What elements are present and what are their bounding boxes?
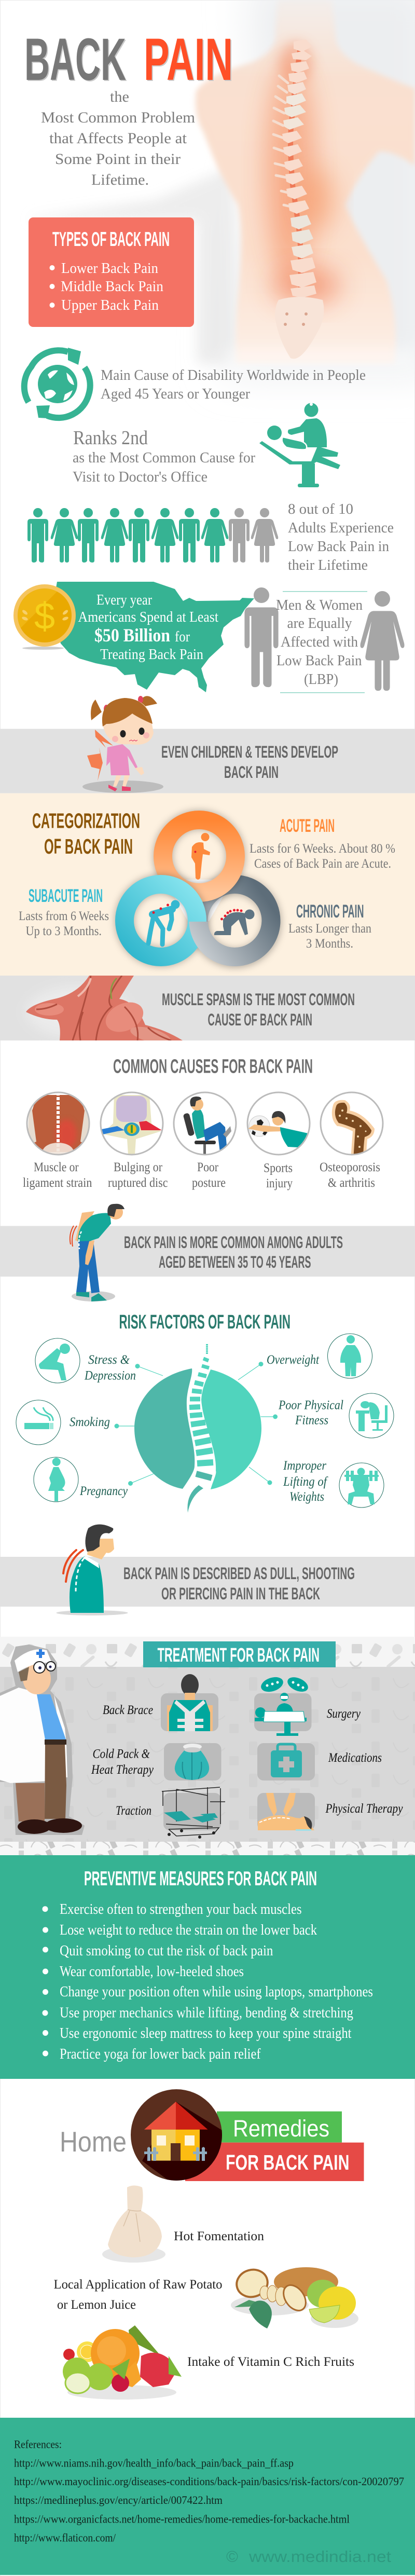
- label: Osteoporosis: [320, 1160, 380, 1174]
- remedy: vitamin C rich fruits: Intake of Vitamin C Rich Fruits: [187, 2355, 354, 2369]
- title: BACK: [24, 26, 126, 93]
- text: men and women equally affected: are Equally: [287, 615, 352, 632]
- remedy: raw potato or lemon juice: [54, 2266, 358, 2328]
- subtitle: [41, 88, 195, 188]
- risk: overweight: [267, 1334, 372, 1378]
- risk: poor physical fitness: Fitness: [295, 1414, 328, 1428]
- text: references: http://www.niams.nih.gov/health_info/back_pain/back_pain_ff.asp: [14, 2457, 294, 2470]
- text: ranks 2nd: as the Most Common Cause for: [73, 450, 256, 466]
- heading: home remedies: Remedies: [233, 2115, 329, 2142]
- image: fruits: [63, 2325, 182, 2400]
- title: PAIN: [144, 26, 233, 93]
- label: Sports: [264, 1161, 293, 1175]
- risk: improper lifting of weights: Improper: [283, 1459, 326, 1473]
- text: or Lemon Juice: [57, 2298, 136, 2312]
- text: 8 out of 10: Low Back Pain in: [288, 539, 389, 555]
- map: USA with spending text: [52, 582, 254, 692]
- cause: poor posture: [174, 1092, 236, 1190]
- icon: gold coin: $: [34, 596, 55, 637]
- risk: overweight: Overweight: [267, 1353, 320, 1367]
- icon: globe with circular arrows: [24, 348, 90, 418]
- text: men and women equally affected: Affected with: [281, 634, 358, 650]
- text: spending: Every year: [96, 592, 153, 608]
- text: chronic pain: [288, 901, 371, 951]
- text: muscle spasm: CAUSE OF BACK PAIN: [208, 1010, 312, 1029]
- list: types: Lower Back Pain: [61, 260, 158, 277]
- text: references: References:: [14, 2438, 62, 2450]
- list: types: Middle Back Pain: [61, 278, 163, 295]
- list: preventive measures: Quit smoking to cut the risk of back pain: [60, 1943, 273, 1959]
- heading: categorization: [32, 809, 140, 858]
- label: Traction: [116, 1804, 151, 1818]
- text: Local Application of Raw Potato: [54, 2278, 222, 2292]
- text: references: https://medlineplus.gov/ency/article/007422.htm: [14, 2493, 223, 2506]
- label: posture: [192, 1176, 226, 1190]
- text: references: http://www.flaticon.com/: [14, 2531, 116, 2544]
- text: main cause of disability: Main Cause of Disability Worldwide in People: [101, 367, 366, 383]
- spine: [273, 39, 324, 359]
- icon: stressed figure: [39, 1344, 70, 1380]
- heading: home remedies: FOR BACK PAIN: [226, 2150, 350, 2174]
- text: described: [123, 1564, 355, 1603]
- subtitle: Lifetime.: [91, 171, 149, 188]
- text: subacute pain: [19, 886, 109, 938]
- text: references: https://www.organicfacts.net/home-remedies/home-remedies-for-backache.html: [14, 2513, 350, 2525]
- text: acute pain: [250, 816, 395, 871]
- text: references: [14, 2438, 404, 2544]
- label: [320, 1160, 380, 1190]
- image: potato and lemon: [231, 2266, 358, 2328]
- item: physical therapy: [257, 1793, 403, 1831]
- text: [54, 2278, 222, 2312]
- icon: doctor with patient: [259, 403, 340, 487]
- text: subacute pain: SUBACUTE PAIN: [29, 886, 103, 906]
- subtitle: that Affects People at: [49, 130, 187, 147]
- icon: man and woman gray: [244, 587, 405, 691]
- risk: improper lifting of weights: Lifting of: [283, 1475, 328, 1489]
- subtitle: Most Common Problem: [41, 109, 195, 126]
- risk: improper lifting of weights: Weights: [289, 1490, 324, 1504]
- text: spending: Treating Back Pain: [100, 647, 203, 663]
- label: Heat Therapy: [91, 1763, 154, 1777]
- label: [264, 1161, 293, 1190]
- center spine: [175, 880, 224, 921]
- heading: categorization: OF BACK PAIN: [44, 834, 133, 858]
- text: chronic pain: 3 Months.: [306, 937, 353, 951]
- risk: pregnancy: [34, 1457, 128, 1502]
- icon: cigarette: [24, 1407, 53, 1429]
- icon: pregnant figure: [48, 1458, 65, 1501]
- lobe: right: [201, 1369, 261, 1489]
- label: & arthritis: [328, 1176, 375, 1190]
- hero illustration: back with spine: [31, 0, 415, 374]
- text: 8 out of 10: their Lifetime: [288, 557, 368, 573]
- risk: stress and depression: Depression: [84, 1369, 136, 1382]
- panel: categorization of back pain: [0, 793, 415, 976]
- icon: house: [144, 2102, 208, 2161]
- text: main cause of disability: Aged 45 Years or Younger: [101, 386, 251, 402]
- lobe: left: [134, 1368, 195, 1489]
- chart: risk factors spine diagram: [114, 1344, 278, 1513]
- text: main cause of disability: [101, 367, 366, 402]
- label: ligament strain: [23, 1176, 92, 1190]
- label: Cold Pack &: [92, 1747, 150, 1761]
- label: [192, 1160, 226, 1190]
- panel: references: [0, 2418, 415, 2575]
- text: even children: BACK PAIN: [224, 763, 279, 782]
- label: [23, 1160, 92, 1190]
- heading: home remedies: Home: [60, 2126, 127, 2158]
- item: surgery: [254, 1674, 361, 1736]
- icon: figure at desk: [356, 1401, 388, 1431]
- text: spending: Americans Spend at Least: [78, 609, 218, 625]
- band: dull shooting pain: [0, 1557, 415, 1607]
- risk: stress and depression: Stress &: [88, 1353, 130, 1367]
- list: preventive measures: Wear comfortable, low-heeled shoes: [60, 1964, 244, 1980]
- text: acute pain: Lasts for 6 Weeks. About 80 %: [250, 842, 395, 856]
- icon: overweight figure: [340, 1335, 361, 1376]
- risk: poor physical fitness: Poor Physical: [278, 1399, 343, 1413]
- icon: blue figure: [148, 900, 179, 944]
- subtitle: the: [110, 88, 129, 105]
- spine tail: [187, 1485, 203, 1513]
- list: preventive measures: Exercise often to strengthen your back muscles: [60, 1901, 302, 1917]
- text: 8 out of 10: 8 out of 10: [288, 501, 353, 517]
- label: ruptured disc: [108, 1176, 168, 1190]
- text: muscle spasm: [162, 990, 355, 1029]
- label: Muscle or: [34, 1160, 79, 1174]
- icon: weight lifter: [344, 1468, 379, 1504]
- ring: blue subacute: [125, 884, 197, 957]
- text: ranks 2nd: Visit to Doctor's Office: [73, 469, 208, 485]
- watermark: www.medindia.net: [248, 2547, 391, 2566]
- icon: man bust with back pain: [56, 1525, 128, 1615]
- heading: home remedies: [60, 2089, 364, 2185]
- label: [108, 1160, 168, 1190]
- text: men and women equally affected: (LBP): [304, 672, 338, 688]
- text: 8 out of 10: [288, 501, 394, 573]
- list: preventive measures: Use proper mechanics while lifting, bending & stretching: [60, 2005, 353, 2021]
- icon: child with back pain: [82, 696, 163, 793]
- label: injury: [266, 1176, 293, 1190]
- band: muscle spasm: [0, 976, 415, 1047]
- risk: improper lifting of weights: [283, 1459, 384, 1508]
- panel: treatment for back pain: [0, 1637, 415, 1855]
- risk: pregnancy: Pregnancy: [79, 1484, 128, 1498]
- risk: poor physical fitness: [278, 1393, 394, 1438]
- ring: gray chronic: [198, 884, 271, 957]
- text: men and women equally affected: Men & Women: [276, 597, 363, 613]
- subtitle: Some Point in their: [55, 150, 181, 168]
- text: spending: [78, 592, 218, 663]
- risk: smoking: [16, 1400, 110, 1445]
- text: ranks 2nd: [73, 427, 256, 485]
- text: even children: [161, 743, 338, 782]
- watermark: ©: [226, 2547, 238, 2566]
- remedy: vitamin C rich fruits: [63, 2325, 354, 2400]
- label: Medications: [328, 1751, 382, 1765]
- connectors: [114, 1362, 278, 1486]
- risk: stress and depression: [35, 1338, 136, 1383]
- item: traction: [116, 1787, 225, 1839]
- heading: risk factors: RISK FACTORS OF BACK PAIN: [119, 1311, 290, 1333]
- cause: osteoporosis and arthritis: [320, 1092, 383, 1190]
- risk: smoking: Smoking: [70, 1415, 110, 1429]
- list: types: [50, 260, 163, 313]
- icon: gray figure: [214, 909, 254, 935]
- panel: types of back pain: [29, 217, 194, 327]
- text: chronic pain: Lasts Longer than: [288, 922, 371, 936]
- band: children and teens: [0, 729, 415, 793]
- text: acute pain: ACUTE PAIN: [280, 816, 335, 836]
- icon: orange figure: [191, 833, 210, 880]
- text: spending: $50 Billion: [94, 625, 170, 646]
- text: ranks 2nd: Ranks 2nd: [73, 427, 148, 449]
- label: Bulging or: [114, 1160, 163, 1174]
- ring: orange acute: [163, 820, 236, 893]
- label: Poor: [197, 1160, 219, 1174]
- heading: treatment: [143, 1641, 336, 1667]
- text: spending: for: [175, 629, 190, 645]
- band: adults 35 to 45: [0, 1226, 415, 1277]
- cause: muscle or ligament strain: [23, 1092, 92, 1190]
- label: Surgery: [327, 1707, 361, 1721]
- text: men and women equally affected: Low Back Pain: [276, 653, 362, 669]
- heading: categorization: CATEGORIZATION: [32, 809, 140, 832]
- text: 8 out of 10: Adults Experience: [288, 520, 394, 536]
- icon: gold coin: [13, 584, 76, 650]
- cause: sports injury: [247, 1092, 310, 1190]
- heading: types of back pain: TYPES OF BACK PAIN: [52, 228, 170, 251]
- chart: 8 of 10 people: [27, 508, 278, 563]
- item: medications: [257, 1743, 382, 1780]
- remedy: hot fomentation: [102, 2186, 264, 2263]
- item: cold pack and heat therapy: [91, 1743, 221, 1780]
- text: acute pain: Cases of Back Pain are Acute.: [254, 857, 391, 871]
- list: preventive measures: Use ergonomic sleep mattress to keep your spine straight: [60, 2025, 352, 2041]
- image: back muscles: [26, 976, 183, 1047]
- ring overlap: gray over blue: [189, 922, 280, 966]
- list: preventive measures: Practice yoga for lower back pain relief: [60, 2046, 261, 2062]
- list: preventive measures: Change your position often while using laptops, smartphones: [60, 1984, 373, 2000]
- text: subacute pain: Lasts from 6 Weeks: [19, 909, 109, 923]
- label: Physical Therapy: [325, 1802, 403, 1816]
- text: men and women equally affected: [276, 591, 367, 693]
- text: adults: [124, 1233, 343, 1271]
- label: [91, 1747, 154, 1777]
- cause: bulging or ruptured disc: [101, 1092, 168, 1190]
- label: Back Brace: [103, 1703, 153, 1717]
- list: types: Upper Back Pain: [61, 297, 159, 313]
- text: subacute pain: Up to 3 Months.: [26, 924, 102, 938]
- icon: bending man: [70, 1204, 125, 1301]
- list: preventive measures: [43, 1901, 373, 2062]
- illustration: doctor: [0, 1645, 85, 1835]
- panel: preventive measures: [0, 1855, 415, 2079]
- spine vertebrae: [189, 1344, 213, 1478]
- list: preventive measures: Lose weight to reduce the strain on the lower back: [60, 1922, 317, 1938]
- remedy: hot fomentation: Hot Fomentation: [174, 2229, 264, 2243]
- item: back brace: [103, 1674, 218, 1731]
